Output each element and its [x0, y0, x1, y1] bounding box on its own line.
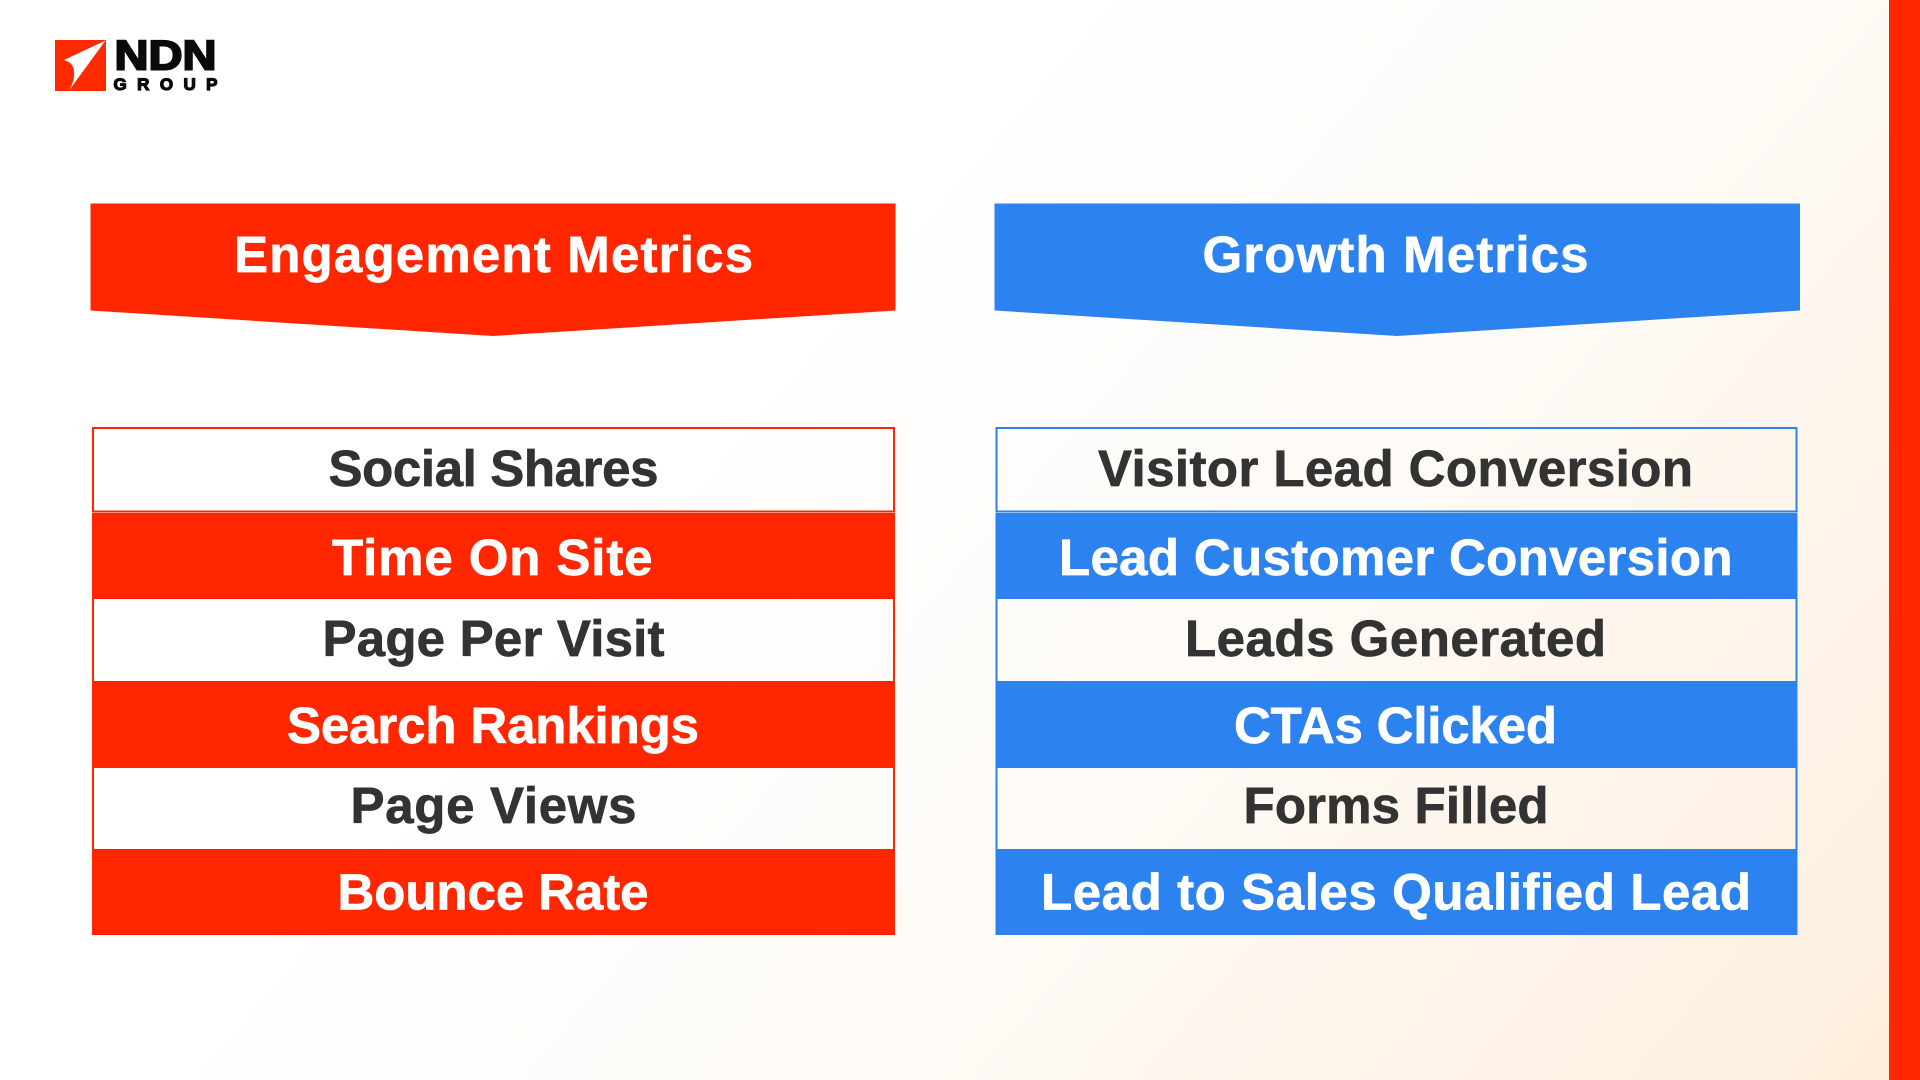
row: Leads Generated: Leads Generated	[1185, 610, 1606, 667]
row: Social Shares: Social Shares	[328, 440, 658, 497]
panel: engagement metrics	[90, 204, 896, 935]
row: CTAs Clicked: CTAs Clicked	[1234, 697, 1557, 754]
heading banner: growth metrics: Growth Metrics	[1202, 226, 1588, 283]
row: Time On Site: Time On Site	[332, 529, 652, 586]
row: Time On Site	[92, 513, 895, 599]
row: Page Per Visit: Page Per Visit	[322, 610, 665, 667]
row: Social Shares	[93, 428, 894, 512]
row: Forms Filled: Forms Filled	[1244, 777, 1548, 834]
panel: growth metrics	[994, 204, 1800, 935]
row: Page Views	[93, 768, 894, 849]
row: Search Rankings: Search Rankings	[287, 697, 699, 754]
accent bar: right edge	[1889, 0, 1920, 1080]
row: Search Rankings	[92, 681, 895, 768]
row: Bounce Rate	[92, 849, 895, 935]
row: Forms Filled	[996, 768, 1796, 849]
logo wordmark: NDN: NDN	[114, 32, 216, 78]
row: Lead to Sales Qualified Lead	[996, 849, 1798, 935]
logo: NDN Group	[55, 32, 218, 94]
row: Lead to Sales Qualified Lead: Lead to Sales Qualified Lead	[1041, 864, 1751, 920]
row: Visitor Lead Conversion: Visitor Lead Conversion	[1098, 440, 1693, 497]
heading banner: growth metrics	[994, 204, 1800, 336]
heading banner: engagement metrics	[90, 204, 896, 336]
row: Page Per Visit	[93, 599, 894, 681]
icon: logo mark	[55, 40, 106, 91]
row: CTAs Clicked	[996, 681, 1798, 768]
row: Lead Customer Conversion	[996, 513, 1798, 599]
table: engagement metrics rows	[92, 428, 895, 935]
logo wordmark: GROUP: GROUP	[114, 75, 218, 94]
row: Bounce Rate: Bounce Rate	[338, 864, 648, 920]
row: Lead Customer Conversion: Lead Customer Conversion	[1059, 529, 1732, 586]
heading banner: engagement metrics: Engagement Metrics	[234, 226, 753, 283]
row: Page Views: Page Views	[350, 777, 636, 834]
row: Leads Generated	[996, 599, 1796, 681]
row: Visitor Lead Conversion	[996, 428, 1796, 512]
table: growth metrics rows	[996, 428, 1798, 935]
